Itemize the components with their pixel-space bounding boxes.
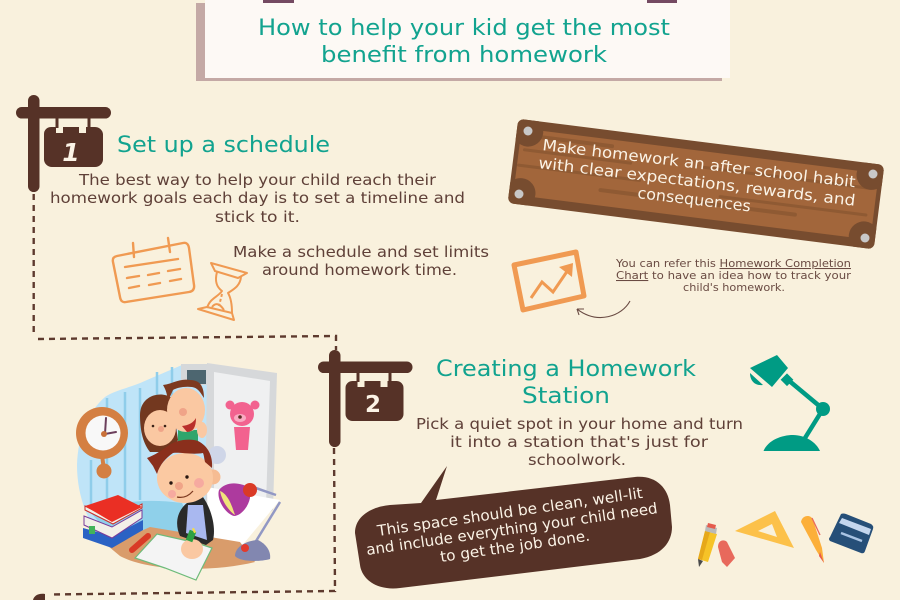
writing hand with pencil: [181, 530, 203, 559]
callout: speech bubble: [355, 466, 672, 588]
text block: schedule limits: [233, 243, 489, 279]
heading: creating a homework station: Creating a Homework: [436, 356, 696, 382]
text block: homework completion chart note: [615, 258, 852, 294]
text block: after school habit: with clear expectations, rewards, and: [538, 154, 856, 210]
icon: pen: [801, 516, 824, 563]
heading: set up a schedule: Set up a schedule: [117, 132, 330, 158]
boy peeking: [163, 380, 207, 442]
door: [181, 363, 277, 535]
text block: schedule description: homework goals each day is to set a timeline and: [50, 189, 465, 207]
wall clock: [76, 407, 128, 478]
text block: after school habit: Make homework an after school habit: [542, 136, 856, 191]
dashed connector path: [34, 194, 336, 594]
desk lamp white glow area: [207, 487, 280, 548]
desk: [108, 527, 255, 569]
main boy: [147, 440, 220, 545]
icon: calendar: [113, 238, 194, 302]
callout text: This space should be clean, well-lit: [375, 484, 644, 540]
icon: teal desk lamp: [750, 355, 830, 451]
open notebook: [135, 534, 212, 580]
heading: creating a homework station: Station: [522, 383, 610, 409]
heading: creating a homework station: [436, 356, 696, 409]
illustration: kids doing homework: [76, 363, 280, 580]
text block: homework completion chart note: child's homework.: [683, 282, 785, 294]
text block: schedule description: The best way to help your child reach their: [78, 171, 437, 189]
text block: schedule limits: Make a schedule and set limits: [233, 243, 489, 261]
icon: sign post 3 top: [33, 594, 45, 600]
icon: hourglass: [198, 263, 247, 320]
icon: notebook: [829, 514, 873, 553]
icon: set square ruler: [735, 511, 794, 548]
title: How to help your kid get the most: [258, 15, 670, 41]
step number 1: 1: [62, 138, 80, 167]
title: benefit from homework: [321, 42, 607, 68]
icon: sign post 2: [318, 350, 412, 447]
callout text: to get the job done.: [439, 527, 591, 566]
icon: sign post 1: [16, 95, 111, 192]
text block: schedule limits: around homework time.: [262, 261, 457, 279]
text block: after school habit: consequences: [637, 184, 752, 215]
panel: wooden sign: [504, 115, 888, 253]
small table lamp: [218, 483, 280, 561]
wall background: [77, 365, 230, 560]
text block: after school habit: [538, 136, 856, 215]
icon: pencil: [698, 523, 717, 567]
arrow: curved pointer to chart: [577, 301, 630, 317]
text block: schedule description: stick to it.: [215, 208, 300, 226]
icon: eraser: [718, 540, 735, 567]
text block: homework completion chart note: Chart to have an idea how to track your: [616, 270, 852, 282]
girl peeking: [140, 395, 178, 452]
panel: title banner: [196, 0, 730, 81]
book stack: [83, 495, 143, 548]
text block: quiet spot description: Pick a quiet spot in your home and turn: [416, 415, 743, 433]
text block: quiet spot description: it into a station that's just for: [450, 433, 709, 451]
crayon: [132, 536, 148, 550]
text block: schedule description: [50, 171, 465, 226]
step number 2: 2: [365, 392, 381, 418]
title: [258, 15, 670, 68]
callout text: and include everything your child need: [365, 499, 659, 559]
pink bear: [226, 400, 260, 450]
text block: homework completion chart note: You can refer this Homework Completion: [615, 258, 851, 270]
text block: quiet spot description: [416, 415, 743, 469]
icon: line chart: [514, 252, 584, 310]
text block: quiet spot description: schoolwork.: [528, 451, 626, 469]
